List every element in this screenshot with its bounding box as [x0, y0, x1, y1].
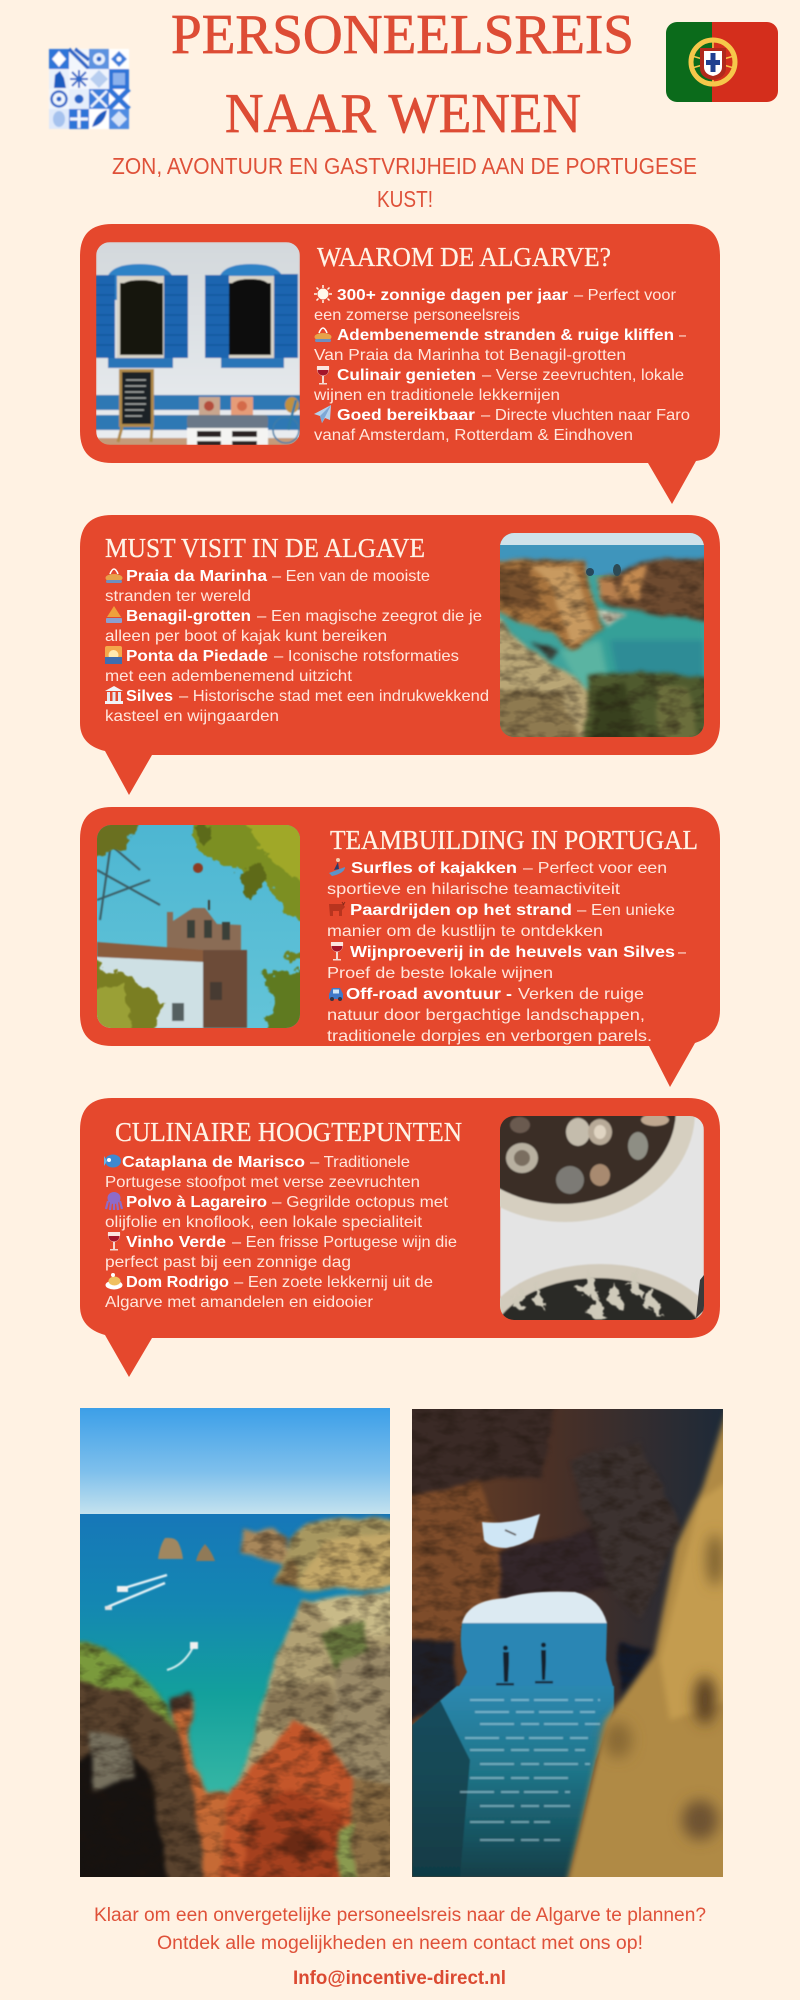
list item: Paardrijden: Paardrijden op het strand [350, 902, 572, 919]
list item: Cataplana [104, 1154, 420, 1191]
call to action text: Klaar om een onvergetelijke personeelsreis naar de Algarve te plannen? [94, 1905, 706, 1926]
list item: Ponta da Piedade: – Iconische rotsformaties [274, 648, 459, 665]
list item: Praia da Marinha [105, 568, 430, 605]
list item: Wijnproeverij: Proef de beste lokale wijnen [327, 965, 553, 982]
list item: Benagil-grotten: Benagil-grotten [126, 608, 251, 625]
list item: stranden en kliffen [314, 327, 686, 364]
list item: Silves: – Historische stad met een indrukwekkend [179, 688, 489, 705]
list item: Ponta da Piedade: Ponta da Piedade [126, 648, 268, 665]
contact email: Info@incentive-direct.nl [293, 1968, 506, 1989]
list item: Dom Rodrigo: Algarve met amandelen en eidooier [105, 1294, 374, 1311]
list item: Wijnproeverij: – [678, 944, 686, 961]
list item: Vinho Verde: Vinho Verde [126, 1234, 226, 1251]
list item: zonnige dagen [314, 285, 677, 324]
title: NAAR WENEN [225, 83, 581, 145]
heading: MUST VISIT IN DE ALGAVE [105, 533, 425, 563]
list item: Praia da Marinha: – Een van de mooiste [272, 568, 430, 585]
list item: Benagil-grotten: alleen per boot of kajak kunt bereiken [105, 628, 387, 645]
list item: Wijnproeverij [327, 942, 686, 982]
list item: Cataplana: – Traditionele [310, 1154, 410, 1171]
list item: Cataplana: Portugese stoofpot met verse zeevruchten [105, 1174, 420, 1191]
panel: waarom de algarve [80, 224, 720, 504]
icon: Portuguese flag [666, 22, 778, 102]
list item: Paardrijden [327, 902, 675, 940]
list item: Cataplana: Cataplana de Marisco [122, 1154, 305, 1171]
photo: cliffs and cove [500, 533, 704, 737]
list item: culinair: wijnen en traditionele lekkernijen [313, 387, 560, 404]
list item: bereikbaar: vanaf Amsterdam, Rotterdam & Eindhoven [314, 427, 633, 444]
call to action text [94, 1905, 706, 1954]
speech bubble [80, 1098, 720, 1377]
speech bubble [80, 515, 720, 795]
title [171, 4, 634, 145]
list item: Dom Rodrigo [105, 1273, 433, 1311]
list item: zonnige dagen: een zomerse personeelsreis [314, 307, 520, 324]
list item: Paardrijden: – Een unieke [577, 902, 675, 919]
icon: azulejo tiles [49, 49, 129, 129]
photo: sea arch with paddleboarders [412, 1409, 723, 1877]
photo: shellfish plates [500, 1116, 704, 1320]
list item: Paardrijden: manier om de kustlijn te ontdekken [327, 923, 603, 940]
call to action text: Ontdek alle mogelijkheden en neem contact met ons op! [157, 1933, 643, 1954]
list item: Wijnproeverij: Wijnproeverij in de heuvels van Silves [350, 944, 675, 961]
list item: Off-road: traditionele dorpjes en verborgen parels. [327, 1028, 652, 1045]
heading: WAAROM DE ALGARVE? [317, 242, 611, 272]
list item: Vinho Verde: – Een frisse Portugese wijn die [232, 1234, 457, 1251]
list item: culinair: Culinair genieten [337, 367, 476, 384]
photo: church tower [97, 825, 300, 1028]
list item: Silves: kasteel en wijngaarden [105, 708, 279, 725]
list item: Off-road: Off-road avontuur [346, 986, 501, 1003]
list item: Benagil-grotten: – Een magische zeegrot die je [257, 608, 482, 625]
speech bubble [80, 224, 720, 504]
list item: Polvo: Polvo à Lagareiro [126, 1194, 267, 1211]
list item: Polvo: olijfolie en knoflook, een lokale specialiteit [105, 1214, 423, 1231]
list item: Surfles: Surfles of kajakken [351, 860, 517, 877]
list item: bereikbaar [314, 405, 690, 444]
panel: must visit [80, 515, 720, 795]
list item: Praia da Marinha: Praia da Marinha [126, 568, 267, 585]
list item: Ponta da Piedade [105, 646, 459, 685]
list item: Vinho Verde: perfect past bij een zonnige dag [105, 1254, 351, 1271]
title: PERSONEELSREIS [171, 4, 634, 66]
list item: culinair [313, 366, 684, 404]
list item: stranden en kliffen: Adembenemende stranden & ruige kliffen [337, 327, 674, 344]
panel: teambuilding [80, 807, 720, 1087]
subtitle: ZON, AVONTUUR EN GASTVRIJHEID AAN DE PORTUGESE [112, 153, 697, 179]
list item: Dom Rodrigo: Dom Rodrigo [126, 1274, 229, 1291]
list item: zonnige dagen: – Perfect voor [574, 287, 677, 304]
list item: stranden en kliffen: Van Praia da Marinha tot Benagil-grotten [314, 347, 626, 364]
list item: Surfles: – Perfect voor een [523, 860, 667, 877]
list item: Ponta da Piedade: met een adembenemend uitzicht [105, 668, 353, 685]
list item: Benagil-grotten [105, 606, 482, 645]
list item: Off-road: Verken de ruige [518, 986, 644, 1003]
list item: Off-road: - [506, 986, 512, 1003]
list item: Dom Rodrigo: – Een zoete lekkernij uit de [234, 1274, 433, 1291]
list item: zonnige dagen: 300+ zonnige dagen per jaar [337, 287, 568, 304]
list item: Surfles [327, 858, 667, 898]
list item: bereikbaar: Goed bereikbaar [337, 407, 475, 424]
list item: Off-road [327, 986, 652, 1045]
list item: stranden en kliffen: – [679, 327, 686, 344]
photo: blue shutters house [96, 242, 300, 445]
list item: Vinho Verde [105, 1232, 457, 1271]
list item: Polvo [105, 1192, 449, 1231]
list item: Off-road: natuur door bergachtige landschappen, [327, 1007, 645, 1024]
heading: CULINAIRE HOOGTEPUNTEN [115, 1117, 462, 1147]
list item: Silves: Silves [126, 688, 173, 705]
speech bubble [80, 807, 720, 1087]
list item: culinair: – Verse zeevruchten, lokale [482, 367, 684, 384]
panel: culinaire hoogtepunten [80, 1098, 720, 1377]
list item: bereikbaar: – Directe vluchten naar Faro [481, 407, 690, 424]
list item: Polvo: – Gegrilde octopus met [272, 1194, 449, 1211]
subtitle: KUST! [377, 186, 433, 212]
heading: TEAMBUILDING IN PORTUGAL [330, 825, 698, 855]
list item: Surfles: sportieve en hilarische teamactiviteit [327, 881, 621, 898]
list item: Silves [105, 686, 489, 725]
list item: Praia da Marinha: stranden ter wereld [105, 588, 251, 605]
subtitle [112, 153, 697, 212]
photo: Algarve coastline [80, 1408, 390, 1877]
